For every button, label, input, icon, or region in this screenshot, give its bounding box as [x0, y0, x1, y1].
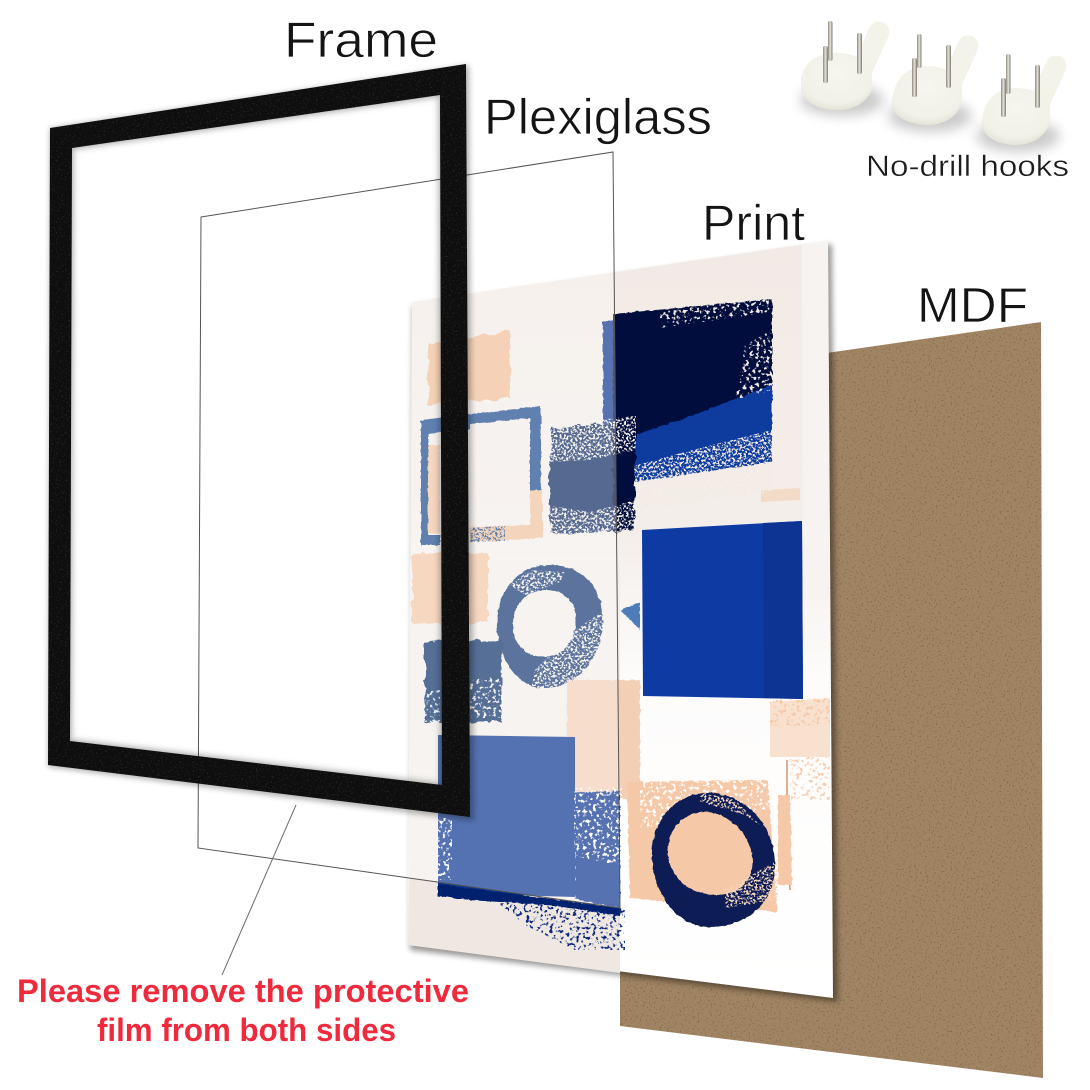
warning note: film from both sides — [97, 1012, 396, 1048]
print shadow — [410, 244, 838, 1002]
art: light peach block mid-left — [412, 552, 488, 624]
art: outlined blue square — [421, 406, 543, 545]
warning note: Please remove the protective — [17, 973, 469, 1009]
frame body — [48, 64, 470, 817]
art: peach patch right — [770, 698, 830, 890]
art: dark textured square — [546, 416, 636, 538]
hook 1 — [800, 21, 884, 116]
label: Print: Print — [702, 195, 805, 251]
warning note — [17, 973, 469, 1048]
art: navy ring — [652, 792, 778, 927]
frame wood grain — [48, 64, 470, 817]
label: Frame: Frame — [284, 12, 438, 68]
frame — [48, 64, 474, 821]
print sheet — [408, 241, 838, 1002]
art: navy square — [603, 296, 772, 510]
plexiglass sheet — [198, 152, 620, 908]
frame cast shadow — [48, 65, 474, 821]
hook 2 — [888, 34, 972, 132]
art: large lower blue square — [438, 735, 622, 908]
label: No-drill hooks: No-drill hooks — [866, 150, 1069, 183]
left paper tone behind plexiglass — [409, 560, 620, 908]
label: Plexiglass: Plexiglass — [484, 89, 712, 145]
art: peach horizontal dab — [761, 488, 800, 502]
pale vertical strip at the right edge — [802, 241, 830, 600]
print paper — [408, 241, 833, 998]
lower-left beige paper tone — [408, 878, 620, 973]
window inner shade — [70, 95, 442, 785]
art: navy splatter below blue square — [438, 884, 625, 950]
art: peach block with circle — [627, 780, 777, 912]
art: small textured square lower-left — [425, 640, 504, 722]
MDF backing board — [620, 322, 1043, 1078]
leader line to plexiglass film — [222, 805, 296, 975]
art: pale peach block centre — [567, 680, 640, 800]
label: MDF: MDF — [917, 279, 1028, 333]
hook 3 — [976, 54, 1060, 152]
art: blue ring — [497, 565, 605, 695]
art: light peach block top-left — [428, 331, 510, 405]
no-drill hooks group — [800, 21, 1060, 152]
art: royal blue square — [620, 521, 803, 699]
